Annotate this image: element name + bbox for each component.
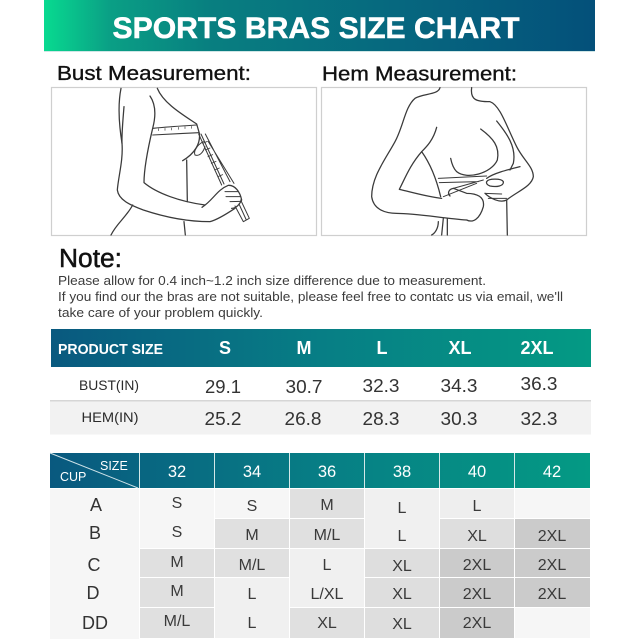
- size values: L: [248, 615, 257, 632]
- cup labels: DD: [82, 613, 108, 633]
- header row: PRODUCT SIZE: [58, 342, 163, 358]
- note text: take care of your problem quickly.: [58, 305, 263, 320]
- size values: M: [170, 554, 184, 571]
- cell shading: [50, 489, 590, 639]
- note heading: Note:: [59, 245, 122, 273]
- cup labels: A: [90, 495, 102, 515]
- size values: L: [398, 500, 407, 517]
- size values: M/L: [164, 613, 190, 630]
- header row: 32: [168, 463, 186, 481]
- title banner: SPORTS BRAS SIZE CHART: [112, 12, 520, 45]
- header row: L: [376, 338, 388, 358]
- note text: [58, 273, 563, 320]
- header row: [50, 453, 590, 488]
- cup labels: C: [88, 555, 100, 575]
- hem row: 26.8: [284, 409, 322, 429]
- table: cup size: [50, 453, 590, 639]
- bust row: 30.7: [286, 377, 322, 397]
- hem row: 32.3: [520, 409, 558, 429]
- title banner: [44, 0, 595, 52]
- panel: bust illustration: [52, 88, 316, 236]
- size values: XL: [392, 558, 412, 575]
- heading: bust measurement: Bust Measurement:: [57, 62, 251, 85]
- cup labels: D: [86, 583, 100, 603]
- size values: L: [323, 557, 332, 574]
- header row: XL: [448, 338, 472, 358]
- size values: 2XL: [463, 586, 491, 603]
- hem row: [50, 402, 591, 434]
- header row: 38: [393, 463, 411, 481]
- table: product size: [50, 329, 591, 434]
- size values: S: [172, 495, 182, 512]
- header row: 40: [468, 463, 486, 481]
- bust row: 34.3: [440, 376, 478, 396]
- bust row: [50, 374, 591, 402]
- size values: M: [245, 527, 259, 544]
- size values: M: [170, 583, 184, 600]
- heading: hem measurement: Hem Measurement:: [322, 62, 517, 86]
- note text: If you find our the bras are not suitable, please feel free to contatc us via email, we'll: [58, 289, 563, 304]
- size values: L/XL: [311, 586, 344, 603]
- size values: L: [473, 498, 482, 515]
- header row: CUP: [60, 470, 86, 484]
- size values: 2XL: [538, 586, 566, 603]
- size values: M/L: [314, 527, 340, 544]
- header row: S: [219, 338, 231, 358]
- size values: S: [172, 524, 182, 541]
- header row: 2XL: [520, 338, 554, 358]
- hem row: HEM(IN): [82, 410, 138, 425]
- note text: Please allow for 0.4 inch~1.2 inch size difference due to measurement.: [58, 273, 486, 288]
- size values: 2XL: [538, 528, 566, 545]
- header row: M: [296, 338, 312, 358]
- bust row: 36.3: [520, 374, 558, 394]
- size values: 2XL: [463, 615, 491, 632]
- hem row: 28.3: [362, 409, 400, 429]
- bust row: 29.1: [205, 377, 241, 397]
- hem row: 25.2: [204, 409, 242, 429]
- size values: [164, 495, 566, 633]
- cup labels: B: [89, 523, 101, 543]
- panel: hem illustration: [322, 88, 586, 236]
- size values: S: [247, 498, 257, 515]
- bust row: 32.3: [362, 376, 400, 396]
- header row: 36: [318, 463, 336, 481]
- size values: M: [320, 497, 334, 514]
- size values: XL: [392, 586, 412, 603]
- header row: 34: [243, 463, 261, 481]
- hem row: 30.3: [440, 409, 478, 429]
- size values: L: [248, 586, 257, 603]
- size values: 2XL: [463, 557, 491, 574]
- size values: 2XL: [538, 557, 566, 574]
- size values: M/L: [239, 557, 265, 574]
- header row: SIZE: [100, 459, 128, 473]
- bust row: BUST(IN): [79, 378, 139, 393]
- header row: [51, 329, 591, 367]
- cup labels: [82, 495, 108, 633]
- size values: XL: [467, 528, 487, 545]
- size values: L: [398, 528, 407, 545]
- size values: XL: [392, 616, 412, 633]
- size values: XL: [317, 615, 337, 632]
- header row: 42: [543, 463, 561, 481]
